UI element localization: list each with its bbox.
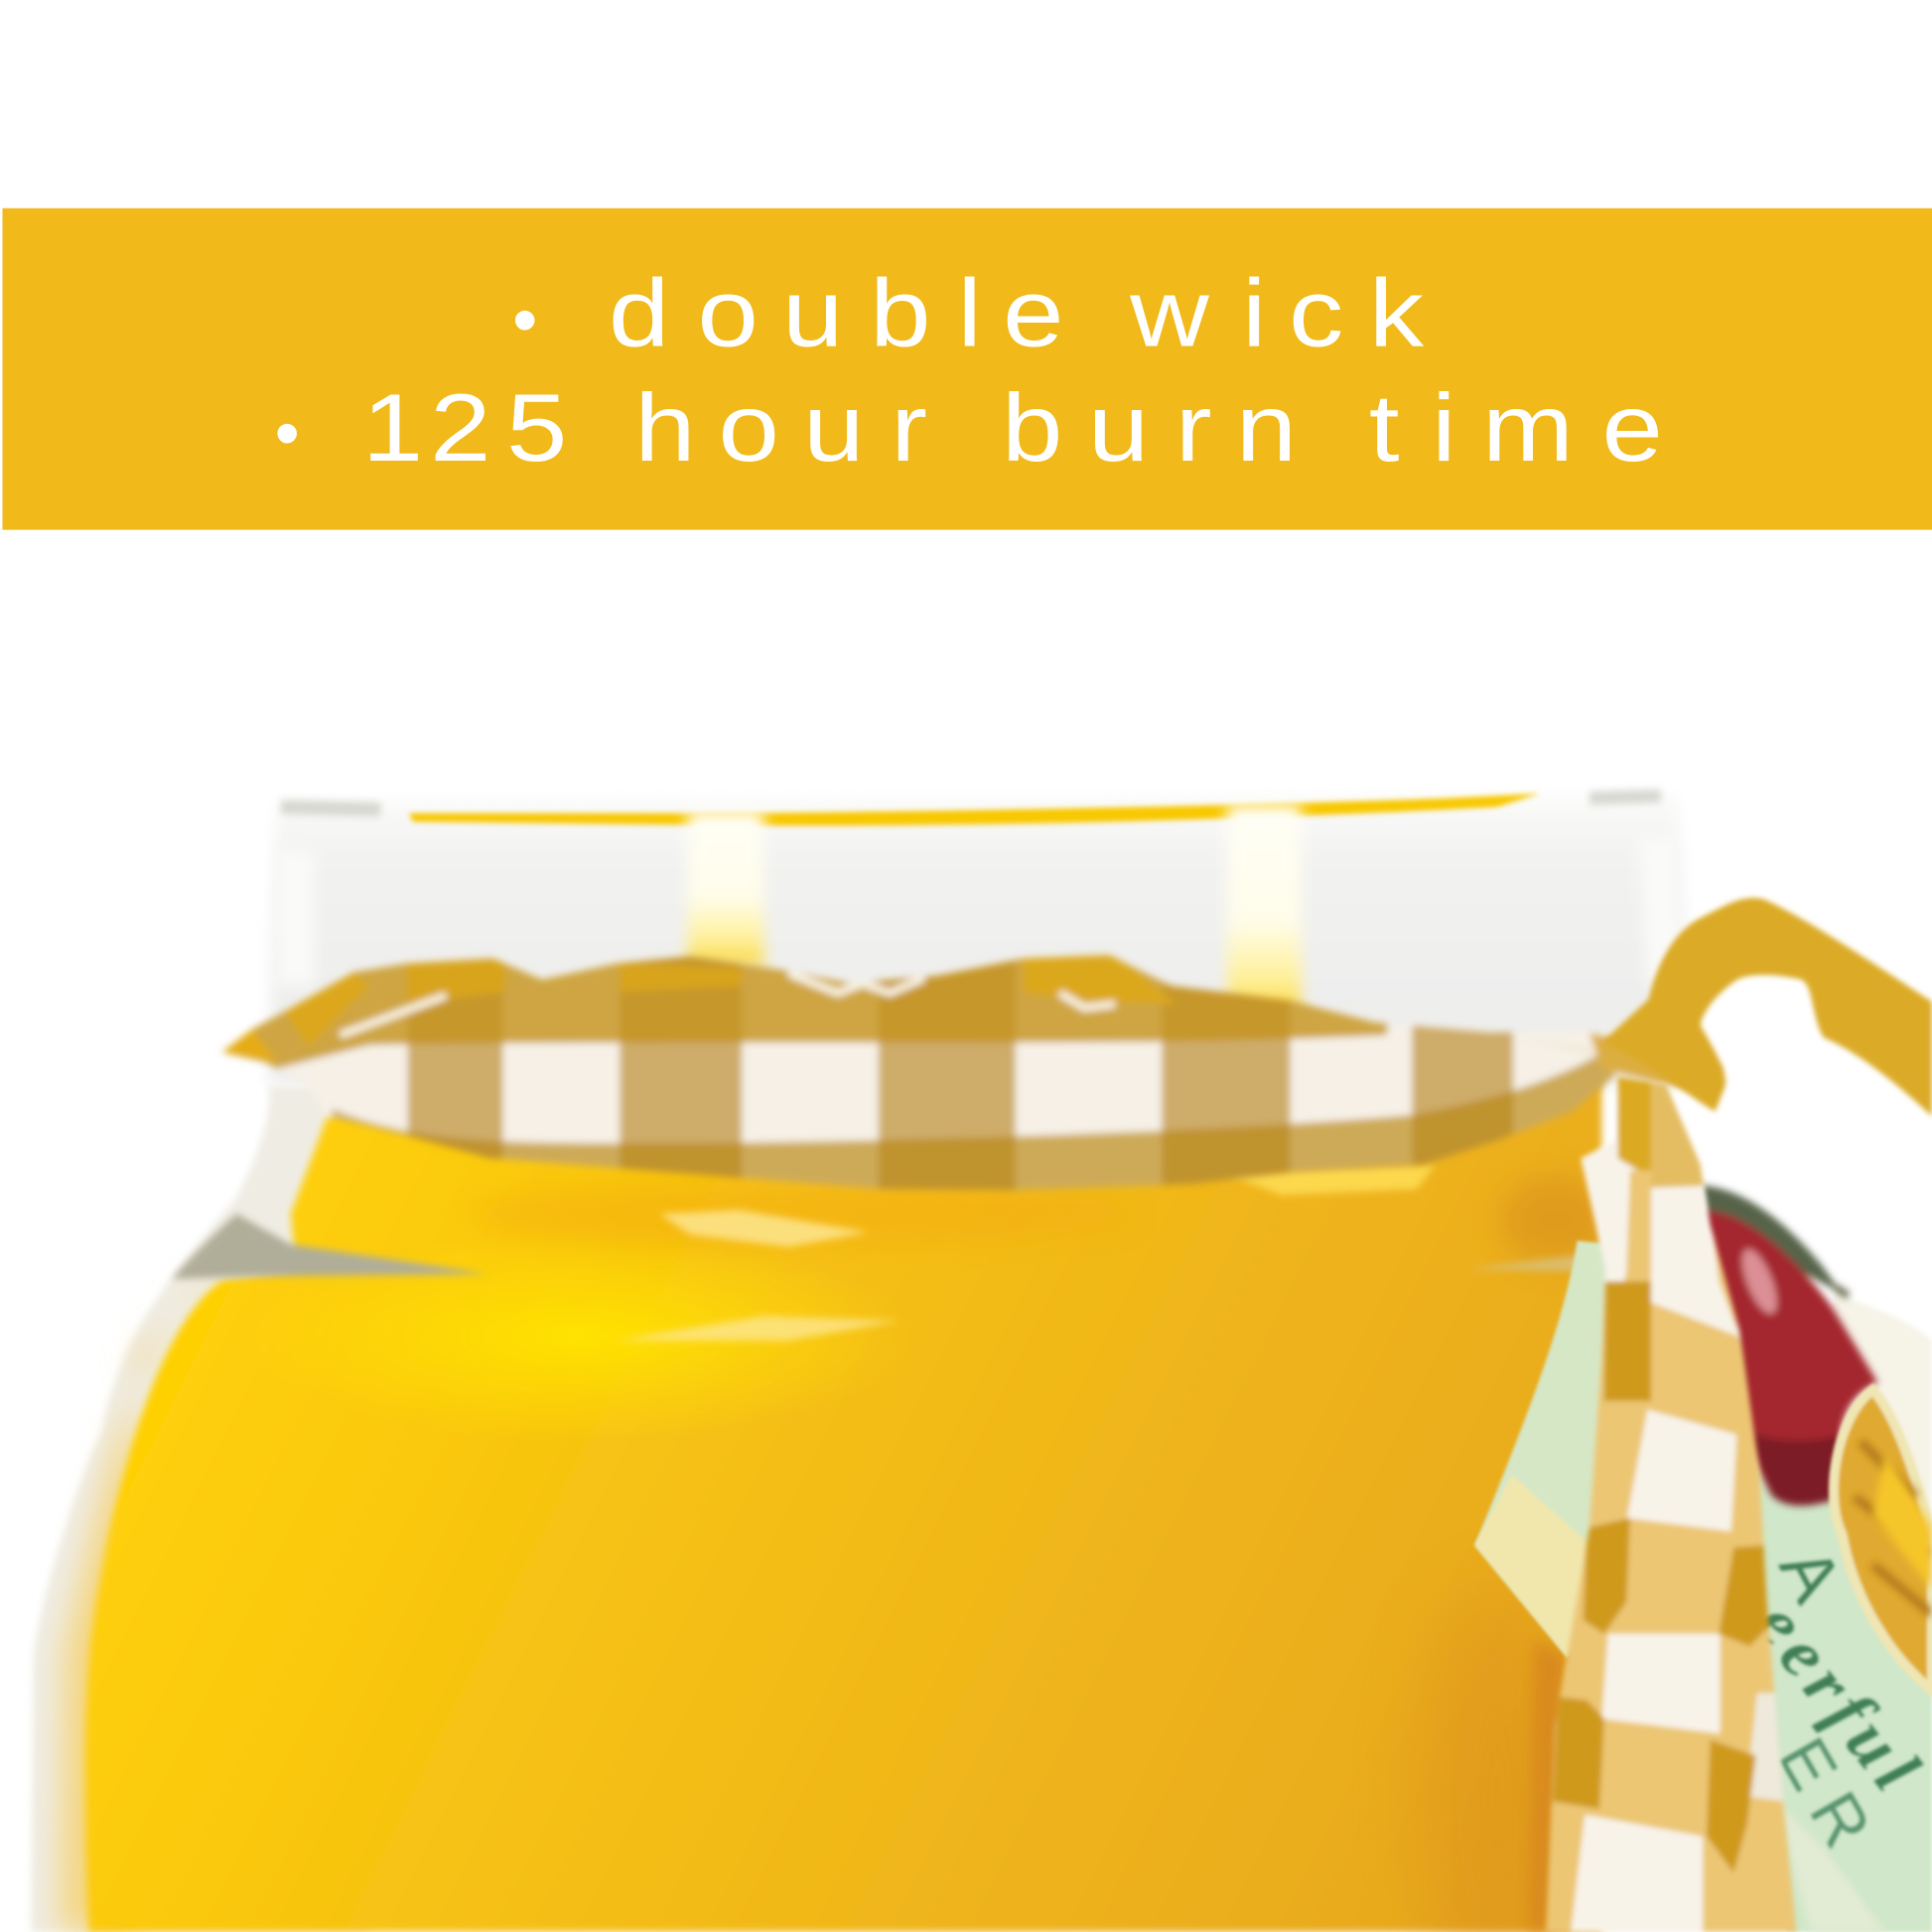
glass jar body — [31, 1087, 369, 1932]
banner background — [2, 208, 1932, 530]
tail white strip — [1746, 1693, 1787, 1801]
gingham ribbon tail — [1540, 1072, 1811, 1932]
apple illustration — [1701, 1185, 1877, 1505]
feature: double wick: double wick — [609, 259, 1425, 366]
shoulder shadow — [173, 1213, 487, 1279]
tail tan rows and columns — [1540, 1171, 1805, 1932]
tail knot — [1618, 1074, 1651, 1177]
banner panel — [2, 208, 1932, 530]
tag flap end — [1475, 1475, 1608, 1657]
tag right panel — [1725, 1355, 1932, 1932]
wax highlights — [617, 1165, 1584, 1340]
wax surface line — [409, 793, 1540, 826]
tag lettering: ER — [1764, 1725, 1893, 1874]
feature: double wick: • — [512, 280, 537, 359]
tag lettering: A — [1764, 1535, 1857, 1614]
tail dark squares — [1553, 1282, 1769, 1872]
hang tag — [1475, 1185, 1932, 1932]
tag left flap — [1475, 1241, 1614, 1657]
feature: 125 hour burn time: 125 hour burn time — [362, 373, 1663, 482]
ribbon loop and knot — [1601, 897, 1932, 1116]
candle jar photo — [31, 793, 1932, 1932]
tag lettering: eerful — [1739, 1587, 1932, 1805]
gingham ribbon around neck — [215, 949, 1743, 1195]
ribbon upper band — [223, 952, 1392, 1072]
ribbon vertical stripes — [408, 949, 1513, 1195]
ribbon lower band — [321, 1047, 1626, 1195]
feature: 125 hour burn time: • — [275, 393, 300, 473]
fruit slice illustration — [1834, 1390, 1932, 1691]
wick reflections — [688, 804, 1302, 1017]
ribbon loose ends and frayed edge — [407, 959, 505, 1004]
glass jar neck — [269, 794, 1691, 1084]
wax body — [85, 1072, 1610, 1932]
tag lettering — [1739, 1535, 1932, 1874]
